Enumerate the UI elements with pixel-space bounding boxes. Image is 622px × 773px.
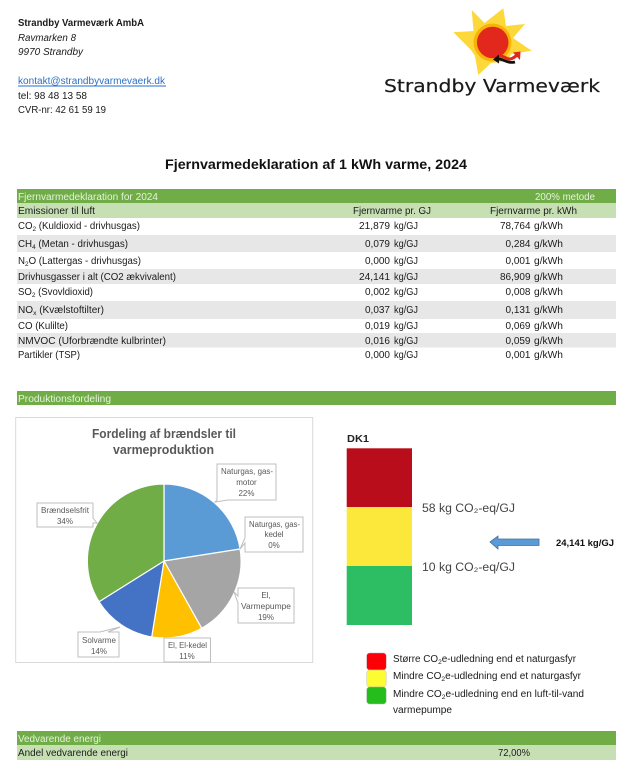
callout: Solvarme 14%: 14% <box>91 647 107 656</box>
emissions table: O (Lattergas - drivhusgas) <box>29 256 141 267</box>
scale bar <box>347 448 412 625</box>
emissions table: CO <box>18 221 33 232</box>
emissions table: kg/GJ <box>394 239 418 250</box>
callout: Naturgas, gaskedel 0%: kedel <box>264 530 284 539</box>
chart title: Fordeling af brændsler til <box>92 427 236 441</box>
emissions table: Fjernvarme pr. kWh <box>490 206 577 217</box>
emissions table: 2 <box>32 292 36 299</box>
callout: Brændselsfrit 34% <box>37 503 97 527</box>
contact block: CVR-nr: 42 61 59 19 <box>18 105 106 116</box>
emissions table: 21,879 <box>359 221 390 232</box>
emissions table: NO <box>18 305 33 316</box>
panel: DK1 scale <box>347 433 515 625</box>
callout: El, Varmepumpe 19%: Varmepumpe <box>241 602 292 611</box>
emissions table: g/kWh <box>534 239 563 250</box>
chart title: varmeproduktion <box>113 443 214 457</box>
section: Vedvarende energi: Andel vedvarende energi <box>18 748 128 759</box>
contact block: Strandby Varmeværk AmbA <box>18 18 144 29</box>
emissions table: kg/GJ <box>394 287 418 298</box>
emissions table: g/kWh <box>534 305 563 316</box>
callout: El, Varmepumpe 19%: El, <box>261 591 271 600</box>
logo: Strandby Varmeværk sun <box>384 8 601 97</box>
arrow <box>490 536 539 549</box>
callout: Naturgas, gaskedel 0%: Naturgas, gas- <box>249 520 300 529</box>
callout: Naturgas, gasmotor 22%: motor <box>236 478 257 487</box>
contact block: kontakt@strandbyvarmevaerk.dk <box>18 76 165 87</box>
legend: 2 <box>442 694 446 701</box>
emissions table: 0,000 <box>365 350 391 361</box>
emissions table: (Svovldioxid) <box>35 287 93 298</box>
emissions table: 0,002 <box>365 287 390 298</box>
legend: 2 <box>441 676 446 683</box>
emissions table: SO <box>18 287 32 298</box>
section: Vedvarende energi <box>17 731 616 760</box>
callout: Naturgas, gasmotor 22%: 22% <box>238 489 255 498</box>
legend: Mindre CO <box>393 689 440 700</box>
chart title <box>92 427 236 457</box>
emissions table: kg/GJ <box>394 221 418 232</box>
section heading: Produktionsfordeling: Produktionsfordeling <box>18 394 111 405</box>
emissions table: 78,764 <box>500 221 531 232</box>
emissions table: (Metan - drivhusgas) <box>36 239 128 250</box>
emissions table: x <box>33 310 37 317</box>
legend <box>367 653 584 716</box>
legend: Større CO <box>393 654 438 665</box>
emissions table: Drivhusgasser i alt (CO2 ækvivalent) <box>18 272 176 283</box>
emissions table: kg/GJ <box>394 336 418 347</box>
emissions table: 2 <box>25 261 29 268</box>
emissions table: 0,001 <box>506 256 530 267</box>
emissions table: 0,069 <box>506 321 530 332</box>
contact block: Ravmarken 8 <box>18 33 77 44</box>
callout: El, El-kedel 11% <box>164 638 210 662</box>
emissions table: g/kWh <box>534 287 563 298</box>
legend: Mindre CO <box>393 671 440 682</box>
emissions table: 0,059 <box>506 336 530 347</box>
emissions table: 0,037 <box>365 305 390 316</box>
emissions table: g/kWh <box>534 321 563 332</box>
callout: Brændselsfrit 34%: Brændselsfrit <box>41 506 90 515</box>
emissions table: NMVOC (Uforbrændte kulbrinter) <box>18 336 166 347</box>
emissions table: kg/GJ <box>394 305 418 316</box>
callout: Naturgas, gaskedel 0%: 0% <box>268 541 280 550</box>
section heading: Produktionsfordeling <box>17 391 616 405</box>
emissions table <box>17 189 616 361</box>
callout: El, Varmepumpe 19%: 19% <box>258 613 274 622</box>
callout: Solvarme 14% <box>78 627 120 657</box>
section: Vedvarende energi: Vedvarende energi <box>18 734 101 745</box>
emissions table: g/kWh <box>534 336 563 347</box>
emissions table: (Kvælstoftilter) <box>36 305 104 316</box>
emissions table: 200% metode <box>535 192 596 203</box>
emissions table: g/kWh <box>534 221 563 232</box>
emissions table: Emissioner til luft <box>18 206 95 217</box>
contact block: 9970 Strandby <box>18 47 84 58</box>
emissions table: g/kWh <box>534 272 563 283</box>
emissions table: 0,019 <box>365 321 390 332</box>
emissions table: 24,141 <box>359 272 390 283</box>
callout: Naturgas, gasmotor 22% <box>215 464 276 502</box>
callout: Naturgas, gasmotor 22%: Naturgas, gas- <box>221 467 273 476</box>
emissions table: Partikler (TSP) <box>18 350 80 361</box>
emissions table: 0,079 <box>365 239 390 250</box>
panel: DK1 scale: 10 kg CO₂-eq/GJ <box>422 562 515 574</box>
emissions table: 86,909 <box>500 272 530 283</box>
emissions table: g/kWh <box>534 350 563 361</box>
panel: pie chart <box>16 418 313 662</box>
legend: 2 <box>438 659 442 666</box>
panel: DK1 scale: DK1 <box>347 433 369 445</box>
legend: varmepumpe <box>393 705 453 716</box>
contact block: tel: 98 48 13 58 <box>18 91 88 102</box>
emissions table: Fjernvarme pr. GJ <box>353 206 431 217</box>
callout: El, El-kedel 11%: El, El-kedel <box>168 641 207 650</box>
emissions table: 0,284 <box>506 239 531 250</box>
emissions table: CO (Kulilte) <box>18 321 68 332</box>
logo: Strandby Varmeværk sun: Strandby Varmeværk <box>384 77 601 97</box>
callout: Solvarme 14%: Solvarme <box>82 636 117 645</box>
emissions table: 0,000 <box>365 256 391 267</box>
emissions table: kg/GJ <box>394 256 418 267</box>
callout: Naturgas, gaskedel 0% <box>240 517 303 552</box>
emissions table: N <box>18 256 25 267</box>
emissions table: g/kWh <box>534 256 563 267</box>
legend: e-udledning end et naturgasfyr <box>442 654 577 665</box>
contact block <box>18 18 166 116</box>
emissions table: 0,008 <box>506 287 531 298</box>
callout: El, El-kedel 11%: 11% <box>179 652 195 661</box>
emissions table: 0,001 <box>506 350 530 361</box>
emissions table: 4 <box>32 244 36 251</box>
emissions table: kg/GJ <box>394 272 418 283</box>
value callout: 24,141 kg/GJ <box>556 538 614 548</box>
title: Fjernvarmedeklaration af 1 kWh varme, 2024 <box>165 156 467 172</box>
emissions table: CH <box>18 239 32 250</box>
emissions table: Fjernvarmedeklaration for 2024 <box>18 192 159 203</box>
emissions table: 0,131 <box>506 305 530 316</box>
emissions table: 0,016 <box>365 336 391 347</box>
emissions table: 2 <box>33 226 36 233</box>
panel: DK1 scale: 58 kg CO₂-eq/GJ <box>422 503 515 515</box>
callout: El, Varmepumpe 19% <box>234 588 294 623</box>
emissions table: (Kuldioxid - drivhusgas) <box>36 221 140 232</box>
section: Vedvarende energi: 72,00% <box>498 748 530 759</box>
legend: e-udledning end en luft-til-vand <box>446 689 584 700</box>
legend: e-udledning end et naturgasfyr <box>445 671 582 682</box>
callout: Brændselsfrit 34%: 34% <box>57 517 73 526</box>
emissions table: kg/GJ <box>394 321 418 332</box>
emissions table: kg/GJ <box>394 350 418 361</box>
pie slices <box>87 484 241 638</box>
